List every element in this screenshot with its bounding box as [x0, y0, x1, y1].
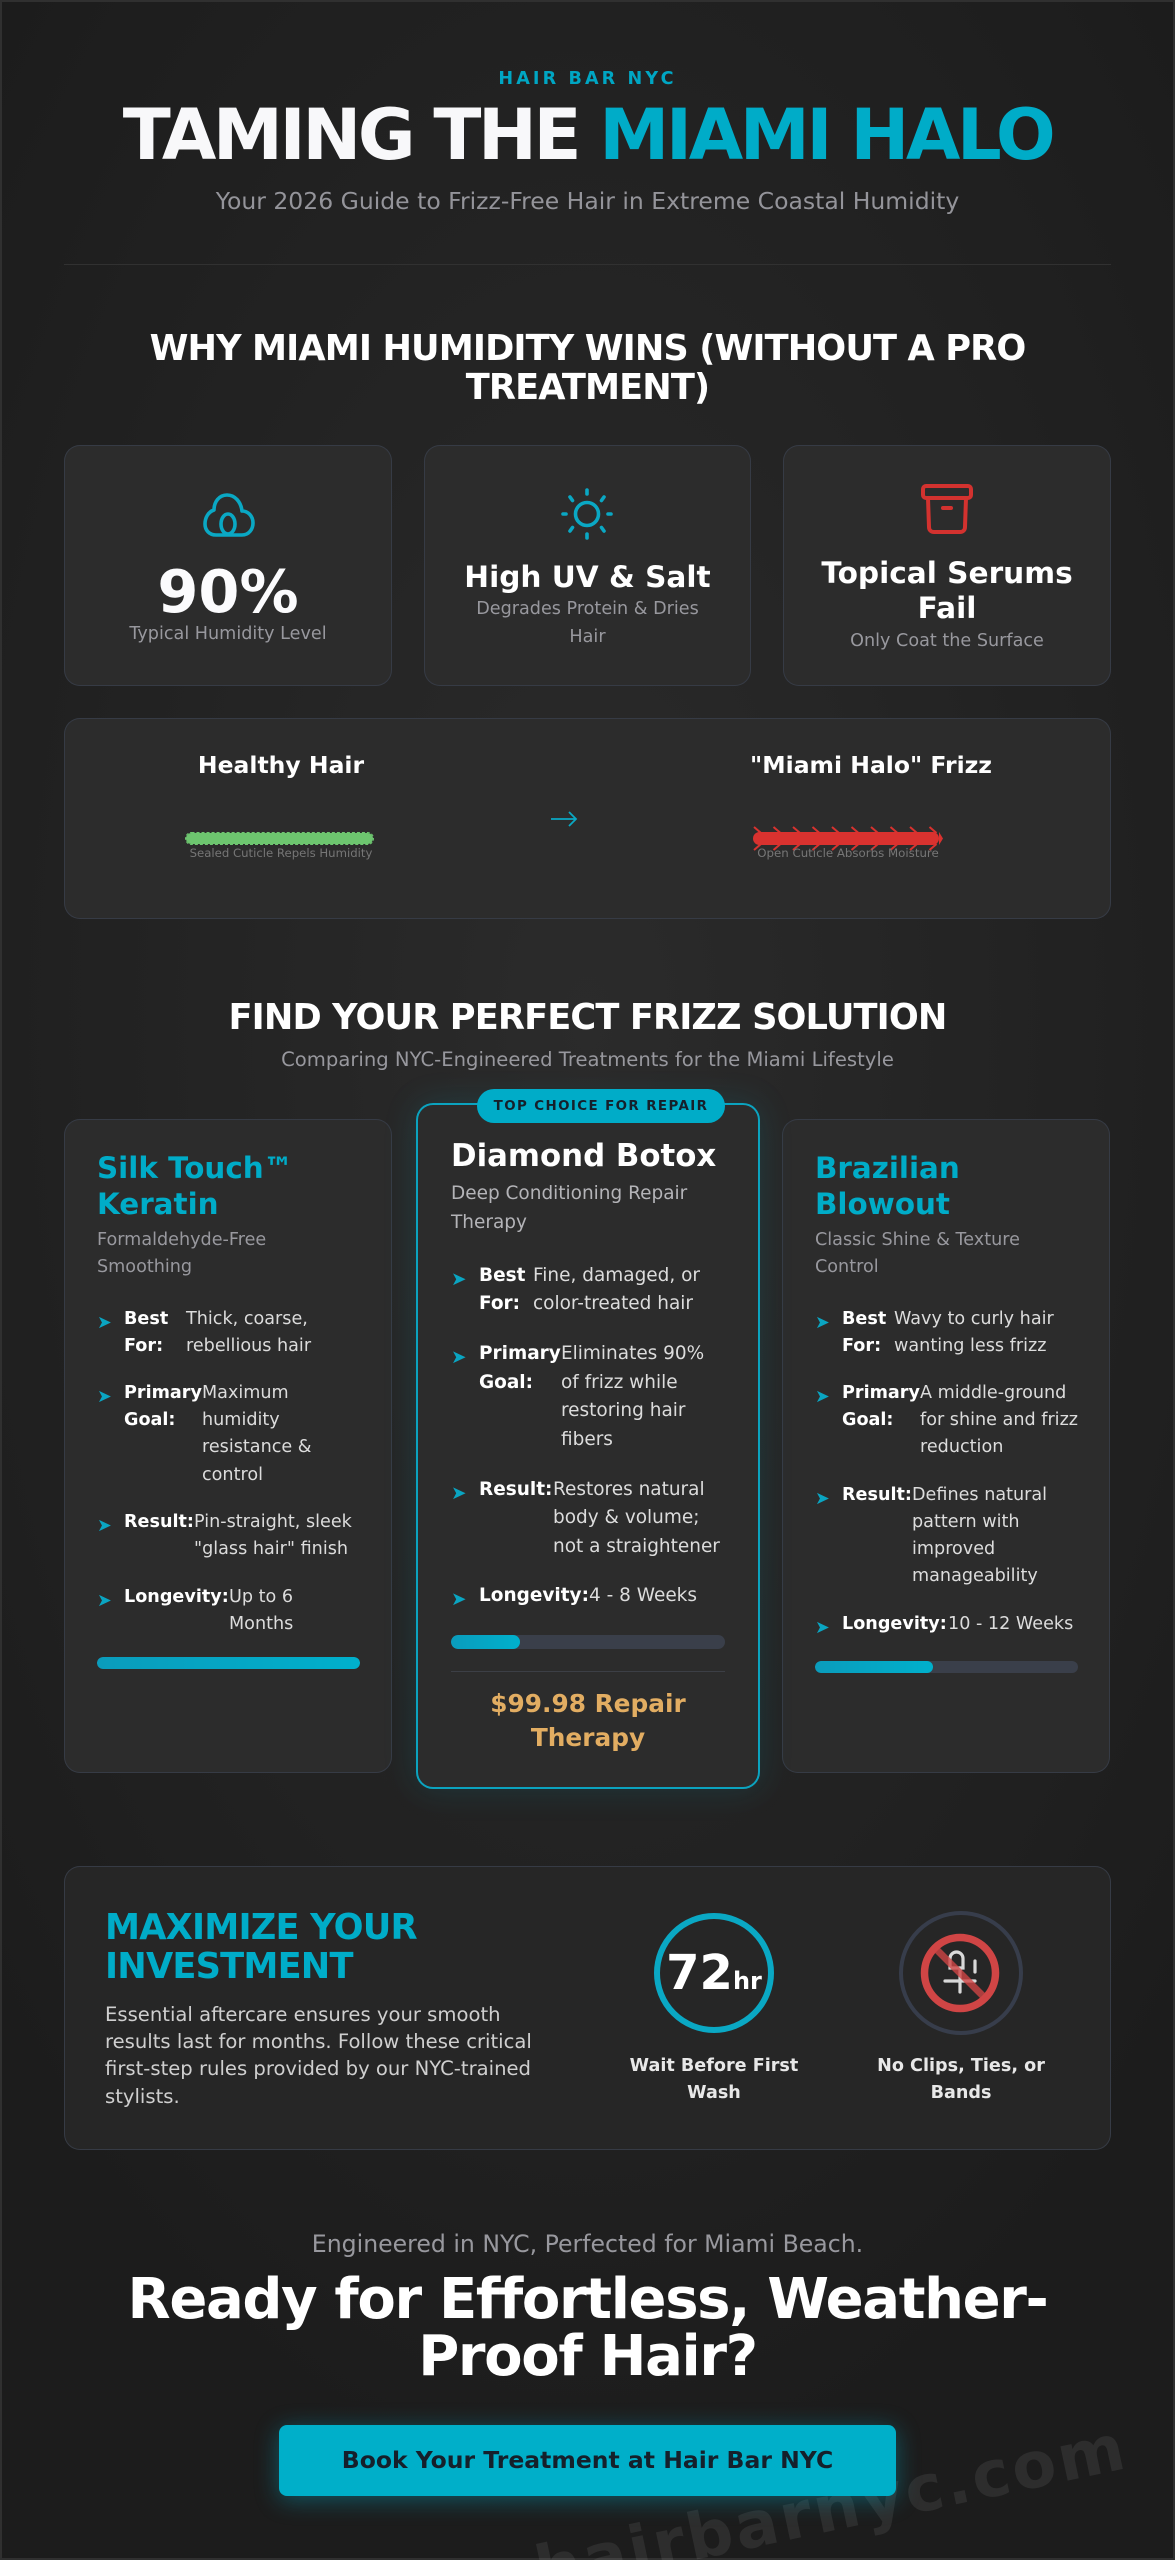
caption — [476, 599, 699, 647]
label: wait: Wash — [687, 2083, 741, 2103]
label: healthy hair: Healthy Hair — [198, 751, 364, 779]
badge: top choice: TOP CHOICE FOR REPAIR — [494, 1099, 708, 1114]
item: best for: ➤ — [97, 1312, 112, 1332]
item: primary goal: ➤ — [97, 1387, 112, 1407]
call to action button: Book Your Treatment at Hair Bar NYC — [342, 2446, 833, 2474]
item: result — [815, 1484, 1047, 1586]
heading: find your solution: FIND YOUR PERFECT FRIZZ SOLUTION — [229, 997, 946, 1038]
price: Therapy — [531, 1723, 645, 1752]
item: primary goal: humidity — [202, 1410, 280, 1430]
longevity bar — [815, 1661, 1078, 1673]
item: primary goal: Goal: — [124, 1410, 175, 1430]
item: longevity: ➤ — [815, 1618, 830, 1638]
item: result: Result: — [479, 1478, 552, 1500]
panel: brazilian blowout — [782, 1119, 1110, 1773]
paragraph: first-step rules provided by our NYC-trained — [105, 2057, 531, 2080]
treatment name: Silk Touch™ — [97, 1151, 293, 1185]
label: wait: Wait Before First — [630, 2056, 798, 2076]
stat: 72 hour wait — [654, 1913, 774, 2033]
arrow — [551, 811, 578, 827]
label: no clips: Bands — [931, 2083, 991, 2103]
caption: sealed cuticle: Sealed Cuticle Repels Humidity — [190, 846, 372, 860]
treatment description: Deep Conditioning Repair — [451, 1183, 687, 1204]
item: result: improved — [912, 1539, 995, 1559]
panel: topical serums card — [783, 445, 1111, 686]
panel: diamond botox featured — [416, 1103, 760, 1789]
item: primary goal — [451, 1343, 704, 1450]
item: best for: Thick, coarse, — [186, 1308, 308, 1328]
item: longevity — [97, 1587, 293, 1634]
item: best for: wanting less frizz — [894, 1336, 1046, 1356]
panel: humidity stat card — [64, 445, 392, 686]
longevity bar — [451, 1635, 725, 1649]
item: best for: rebellious hair — [186, 1336, 311, 1356]
item: longevity: ➤ — [451, 1589, 466, 1610]
call to action button — [279, 2425, 896, 2496]
stat: 72 hour wait: 72hr — [666, 1945, 762, 2001]
item: result: Defines natural — [912, 1484, 1047, 1504]
treatment description — [97, 1230, 266, 1277]
item: result: manageability — [912, 1566, 1038, 1586]
treatment name: Brazilian — [815, 1151, 960, 1185]
item: best for: For: — [842, 1336, 881, 1356]
price: $99.98 Repair — [490, 1689, 686, 1718]
panel: hair diagram — [64, 718, 1111, 919]
item: best for: Best — [124, 1308, 168, 1328]
footer headline — [128, 2267, 1047, 2388]
paragraph: Essential aftercare ensures your smooth — [105, 2003, 501, 2026]
treatment name — [815, 1151, 960, 1221]
item: primary goal — [815, 1383, 1078, 1457]
footer eyebrow: Engineered in NYC, Perfected for Miami Beach. — [312, 2230, 863, 2258]
item: longevity — [815, 1614, 1073, 1638]
item: best for — [815, 1308, 1054, 1356]
item: longevity: 10 - 12 Weeks — [948, 1614, 1073, 1634]
item: longevity — [451, 1585, 697, 1610]
treatment name: Blowout — [815, 1187, 950, 1221]
item: best for: ➤ — [815, 1312, 830, 1332]
item: best for: Wavy to curly hair — [894, 1308, 1054, 1328]
item: primary goal: of frizz while — [561, 1372, 678, 1393]
item: best for: ➤ — [451, 1268, 466, 1290]
paragraph — [105, 2003, 532, 2108]
icon: no clips — [899, 1911, 1023, 2035]
item: primary goal: Maximum — [202, 1383, 289, 1403]
caption: Typical Humidity Level — [129, 624, 327, 644]
label: wait — [630, 2056, 798, 2103]
item: best for: For: — [124, 1336, 163, 1356]
item: longevity: Longevity: — [842, 1614, 947, 1634]
item: result: "glass hair" finish — [194, 1539, 348, 1559]
caption: Hair — [569, 627, 606, 647]
caption: open cuticle: Open Cuticle Absorbs Moisture — [757, 846, 939, 860]
item: primary goal: Goal: — [479, 1372, 533, 1393]
item: result: ➤ — [97, 1516, 112, 1536]
panel: UV and salt card — [424, 445, 751, 686]
item: result: not a straightener — [553, 1536, 720, 1557]
item: best for: Best — [842, 1308, 886, 1328]
treatment description — [450, 1183, 688, 1232]
item: primary goal: fibers — [561, 1429, 613, 1450]
section heading — [105, 1906, 417, 1986]
longevity bar — [97, 1657, 360, 1669]
item: result: ➤ — [451, 1482, 466, 1504]
item: best for: For: — [479, 1293, 520, 1314]
card heading: Topical Serums — [821, 556, 1073, 590]
treatment description: Formaldehyde-Free — [97, 1230, 266, 1250]
caption: Only Coat the Surface — [850, 631, 1044, 651]
label: no clips — [877, 2056, 1045, 2103]
item: result — [451, 1478, 720, 1557]
item: primary goal: reduction — [920, 1437, 1003, 1457]
item: longevity: ➤ — [97, 1591, 112, 1611]
icon: sun — [561, 488, 613, 540]
item: best for: Best — [479, 1264, 525, 1286]
treatment name: Keratin — [97, 1187, 219, 1221]
footer headline: Proof Hair? — [418, 2324, 757, 2388]
item: primary goal: ➤ — [815, 1387, 830, 1407]
section subtitle: Comparing NYC-Engineered Treatments for the Miami Lifestyle — [281, 1048, 894, 1070]
stat: 90%: 90% — [157, 557, 299, 626]
item: result: Pin-straight, sleek — [194, 1512, 352, 1532]
item: longevity: Up to 6 — [229, 1587, 293, 1607]
card heading: High UV & Salt — [464, 560, 711, 594]
caption: Degrades Protein & Dries — [476, 599, 699, 619]
heading: why miami humidity wins: TREATMENT) — [466, 366, 709, 408]
treatment description: Control — [815, 1257, 879, 1277]
paragraph: stylists. — [105, 2085, 180, 2108]
treatment description: Therapy — [451, 1212, 527, 1232]
item: longevity: 4 - 8 Weeks — [589, 1585, 697, 1606]
item: longevity: Longevity: — [124, 1587, 229, 1607]
item: primary goal: Goal: — [842, 1410, 893, 1430]
item: primary goal: A middle-ground — [920, 1383, 1066, 1403]
panel: silk touch keratin — [64, 1119, 392, 1773]
item: longevity: Months — [229, 1614, 293, 1634]
card heading: Fail — [918, 591, 976, 625]
item: primary goal: Primary — [842, 1383, 920, 1403]
paragraph: results last for months. Follow these critical — [105, 2030, 532, 2053]
label: no clips: No Clips, Ties, or — [877, 2056, 1045, 2076]
item: best for — [97, 1308, 312, 1356]
subtitle: Your 2026 Guide to Frizz-Free Hair in Extreme Coastal Humidity — [216, 187, 959, 215]
item: best for — [451, 1264, 700, 1314]
badge: top choice — [477, 1089, 725, 1123]
icon: humid cloud — [203, 493, 255, 537]
item: primary goal: resistance & — [202, 1437, 312, 1457]
label: frizz: "Miami Halo" Frizz — [750, 751, 992, 779]
item: result: body & volume; — [553, 1507, 699, 1528]
price — [490, 1689, 686, 1752]
heading: why miami humidity wins — [150, 328, 1025, 408]
item: primary goal: for shine and frizz — [920, 1410, 1078, 1430]
item: longevity: Longevity: — [479, 1585, 589, 1606]
item: result — [97, 1512, 352, 1559]
treatment description: Smoothing — [97, 1257, 192, 1277]
item: result: ➤ — [815, 1488, 830, 1508]
card heading — [821, 556, 1073, 625]
section heading: INVESTMENT — [105, 1946, 353, 1986]
frizzy hair strand — [753, 826, 943, 851]
panel: maximize your investment — [64, 1866, 1111, 2150]
section heading: MAXIMIZE YOUR — [105, 1906, 417, 1948]
heading: why miami humidity wins: WHY MIAMI HUMIDITY WINS (WITHOUT A PRO — [150, 328, 1025, 368]
title: TAMING THE MIAMI HALO — [123, 94, 1052, 176]
item: primary goal: Eliminates 90% — [561, 1343, 704, 1364]
item: best for: Fine, damaged, or — [533, 1264, 700, 1286]
item: primary goal: ➤ — [451, 1347, 466, 1368]
treatment name — [97, 1151, 293, 1221]
icon: product jar — [921, 484, 973, 534]
item: result: Result: — [842, 1484, 912, 1504]
footer headline: Ready for Effortless, Weather- — [128, 2267, 1047, 2332]
treatment name: Diamond Botox — [451, 1138, 716, 1174]
item: result: Restores natural — [553, 1478, 705, 1500]
item: primary goal: Primary — [479, 1343, 561, 1364]
item: result: pattern with — [912, 1512, 1020, 1532]
item: best for: color-treated hair — [533, 1293, 693, 1314]
healthy hair strand — [185, 832, 374, 845]
item: result: Result: — [124, 1512, 194, 1532]
brand label: HAIR BAR NYC — [498, 69, 677, 89]
treatment description — [815, 1230, 1020, 1277]
item: primary goal: restoring hair — [561, 1400, 685, 1421]
item: primary goal: control — [202, 1465, 263, 1485]
treatment description: Classic Shine & Texture — [815, 1230, 1020, 1250]
item: primary goal — [97, 1383, 312, 1485]
item: primary goal: Primary — [124, 1383, 202, 1403]
